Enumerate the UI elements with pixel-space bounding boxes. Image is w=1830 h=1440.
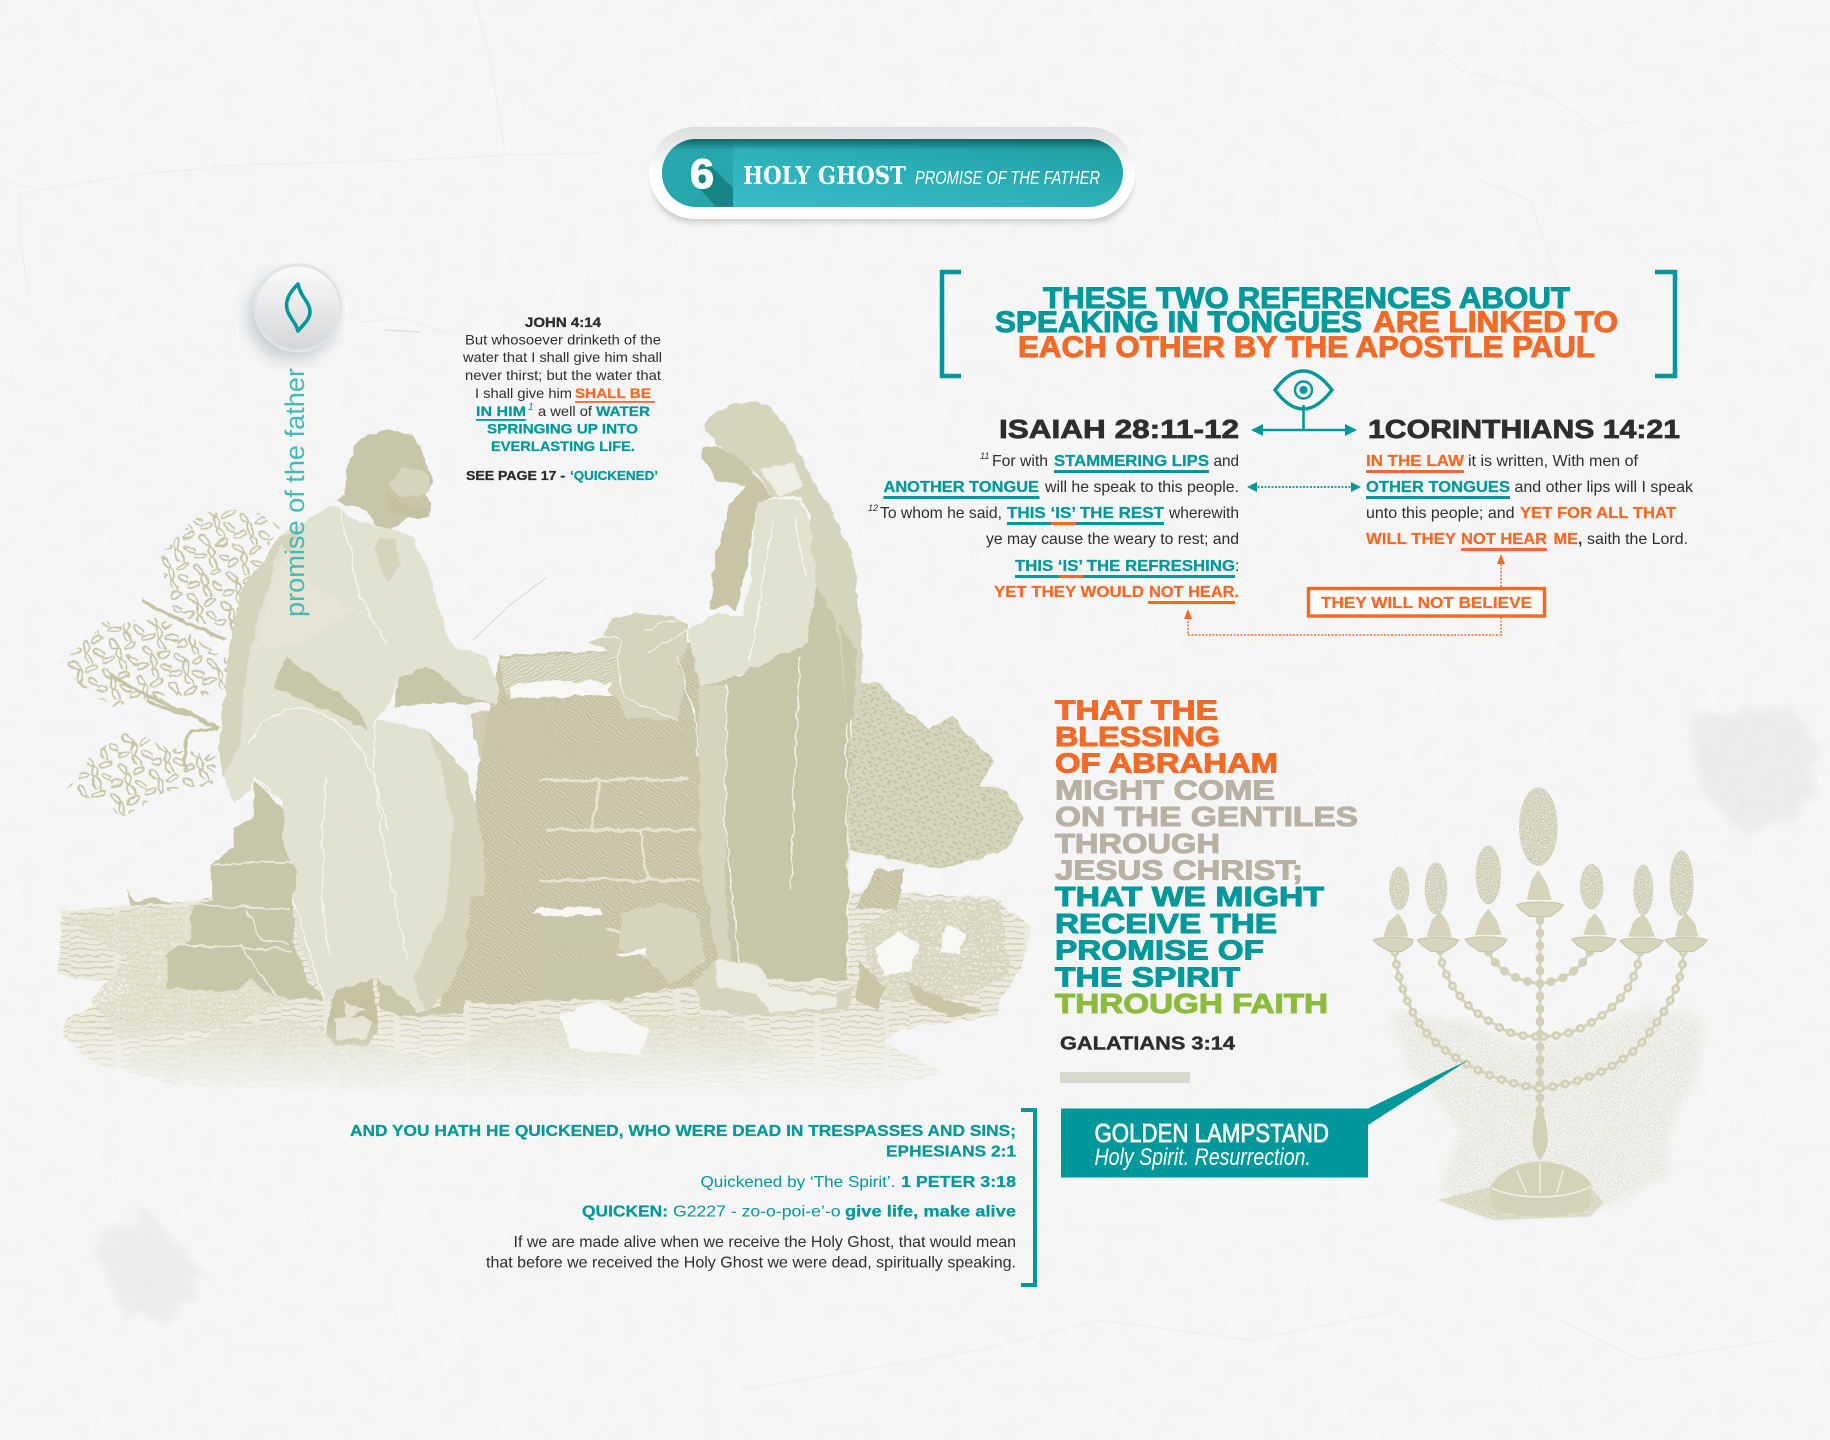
body and sleeve	[688, 498, 817, 687]
reference: 1 Corinthians 14:21: YET FOR ALL THAT	[1520, 505, 1676, 522]
robe shading	[273, 657, 367, 730]
vertical label: promise of the father	[280, 368, 310, 617]
verse: Galatians 3:14: THROUGH FAITH	[1055, 988, 1328, 1019]
heading: two references: ARE LINKED TO	[1373, 306, 1618, 339]
note: quickened: If we are made alive when we receive the Holy Ghost, that would mean	[514, 1234, 1016, 1251]
note: quickened: G2227 - zo-o-poi-e’-o	[673, 1204, 841, 1220]
reference: Isaiah 28:11-12: and	[1214, 453, 1239, 470]
John 4:14 verse: EVERLASTING LIFE.	[491, 438, 635, 454]
smudge	[1390, 1007, 1703, 1220]
note: quickened	[350, 1123, 1016, 1272]
verse: Galatians 3:14: THE SPIRIT	[1055, 961, 1240, 992]
John 4:14 verse: a well of	[538, 403, 592, 419]
heading: two references	[995, 282, 1618, 364]
section title pill: PROMISE OF THE FATHER	[915, 168, 1100, 188]
callout: golden lampstand: Holy Spirit. Resurrection.	[1094, 1144, 1311, 1171]
note: quickened: AND YOU HATH HE QUICKENED, WHO WERE DEAD IN TRESPASSES AND SINS;	[350, 1123, 1016, 1140]
Jesus	[220, 430, 498, 1013]
bottom stones	[530, 903, 707, 1000]
verse: Galatians 3:14: GALATIANS 3:14	[1060, 1032, 1236, 1054]
note: quickened: that before we received the Holy Ghost we were dead, spiritually speaking.	[486, 1254, 1016, 1272]
hair	[710, 477, 773, 610]
note: quickened: Quickened by ‘The Spirit’.	[700, 1174, 896, 1191]
reference: Isaiah 28:11-12: 11	[980, 451, 989, 461]
reference: Isaiah 28:11-12: will he speak to this people.	[1044, 479, 1239, 496]
verse: Galatians 3:14: THROUGH	[1055, 828, 1220, 859]
reference: 1 Corinthians 14:21: IN THE LAW	[1366, 453, 1465, 470]
heading: two references: EACH OTHER BY THE APOSTLE PAUL	[1018, 331, 1595, 364]
heading bracket: right	[1655, 272, 1675, 376]
verse: Galatians 3:14: JESUS CHRIST;	[1055, 854, 1303, 886]
reference: Isaiah 28:11-12: :	[1235, 558, 1239, 575]
cups	[1373, 902, 1707, 953]
jar and hands	[588, 613, 688, 720]
base	[1437, 1113, 1603, 1220]
verse: Galatians 3:14	[1055, 694, 1358, 1054]
robe	[220, 505, 498, 1013]
arms	[1395, 917, 1683, 1133]
reference: Isaiah 28:11-12	[868, 414, 1239, 604]
note: quickened: 1 PETER 3:18	[901, 1174, 1016, 1191]
verse: Galatians 3:14: PROMISE OF	[1055, 935, 1264, 966]
John 4:14 verse: IN HIM	[476, 403, 526, 419]
reference: Isaiah 28:11-12: ANOTHER TONGUE	[884, 479, 1039, 496]
verse: Galatians 3:14: THAT WE MIGHT	[1055, 881, 1324, 912]
heading: two references: SPEAKING IN TONGUES	[995, 306, 1362, 339]
head	[335, 430, 433, 530]
reference: Isaiah 28:11-12: NOT HEAR.	[1149, 584, 1239, 601]
callout: they will not believe: THEY WILL NOT BELIEVE	[1321, 595, 1532, 612]
left bush	[59, 509, 279, 818]
face	[702, 445, 757, 487]
John 4:14 verse: never thirst; but the water that	[465, 367, 661, 383]
John 4:14 verse: ‘QUICKENED’	[570, 468, 658, 483]
callout: golden lampstand	[1061, 1060, 1468, 1178]
reference: 1 Corinthians 14:21: WILL THEY	[1366, 531, 1456, 548]
John 4:14 verse	[462, 314, 662, 483]
note: quickened: QUICKEN:	[582, 1204, 668, 1220]
reference: Isaiah 28:11-12: THIS ‘IS’ THE REFRESHING	[1015, 558, 1235, 575]
section title pill: 6	[690, 150, 714, 197]
John 4:14 verse: SHALL BE	[575, 385, 651, 401]
John 4:14 verse: 1	[528, 402, 534, 413]
note: quickened: give life, make alive	[845, 1204, 1016, 1220]
verse: Galatians 3:14: THAT THE	[1055, 694, 1218, 725]
section title pill: HOLY GHOST	[743, 161, 906, 190]
scarf	[703, 402, 863, 723]
woman	[588, 402, 863, 980]
reference: Isaiah 28:11-12: ISAIAH 28:11-12	[999, 414, 1239, 444]
reference: Isaiah 28:11-12: THIS ‘IS’ THE REST	[1007, 505, 1164, 522]
reference: 1 Corinthians 14:21: it is written, With men of	[1468, 453, 1639, 470]
illustration: Jesus and the woman at the well	[58, 402, 1030, 1095]
verse: Galatians 3:14: OF ABRAHAM	[1055, 748, 1278, 779]
verse: Galatians 3:14: RECEIVE THE	[1055, 908, 1277, 939]
reference: 1 Corinthians 14:21: ME	[1554, 531, 1578, 548]
reference: 1 Corinthians 14:21: NOT HEAR	[1461, 531, 1547, 548]
dotted connector arrows	[1184, 554, 1505, 635]
reference: Isaiah 28:11-12: ye may cause the weary to rest; and	[986, 531, 1239, 548]
reference: Isaiah 28:11-12: 12	[868, 503, 878, 513]
reference: Isaiah 28:11-12: To whom he said,	[880, 505, 1002, 522]
reference: 1 Corinthians 14:21: OTHER TONGUES	[1366, 479, 1510, 496]
ground and rocks	[58, 880, 1030, 1095]
note: quickened: EPHESIANS 2:1	[886, 1144, 1016, 1160]
verse: Galatians 3:14: BLESSING	[1055, 721, 1220, 752]
flames	[1383, 870, 1698, 937]
reference: Isaiah 28:11-12: For with	[992, 453, 1048, 470]
reference: 1 Corinthians 14:21: unto this people; and	[1366, 505, 1514, 522]
icon: eye with double arrow	[1251, 371, 1357, 436]
steps	[167, 780, 323, 1000]
reference: 1 Corinthians 14:21: saith the Lord.	[1587, 531, 1688, 548]
reference: 1 Corinthians 14:21: 1CORINTHIANS 14:21	[1368, 414, 1680, 444]
John 4:14 verse: But whosoever drinketh of the	[465, 332, 661, 348]
verse: Galatians 3:14: MIGHT COME	[1055, 774, 1275, 805]
number shadow	[690, 158, 733, 207]
heading: two references: THESE TWO REFERENCES ABOUT	[1043, 282, 1570, 315]
reference: Isaiah 28:11-12: YET THEY WOULD	[994, 584, 1144, 601]
callout: golden lampstand: GOLDEN LAMPSTAND	[1094, 1118, 1329, 1148]
right bush	[848, 683, 1023, 910]
reference: 1 Corinthians 14:21: ,	[1578, 531, 1582, 548]
John 4:14 verse: JOHN 4:14	[525, 314, 601, 330]
dotted arrow between tongues	[1247, 482, 1361, 492]
skirt	[697, 583, 850, 980]
callout: they will not believe	[1308, 588, 1544, 616]
sandals	[325, 980, 465, 1045]
John 4:14 verse: water that I shall give him shall	[462, 349, 662, 365]
section title pill	[649, 127, 1135, 222]
bracket: quickened note	[1021, 1110, 1035, 1285]
verse: Galatians 3:14: ON THE GENTILES	[1055, 801, 1358, 832]
John 4:14 verse: SEE PAGE 17 -	[466, 468, 565, 483]
reference: 1 Corinthians 14:21	[1366, 414, 1694, 551]
smoke	[1389, 787, 1694, 916]
heading bracket: left	[942, 272, 961, 376]
well	[440, 642, 738, 1006]
John 4:14 verse: I shall give him	[475, 385, 572, 401]
John 4:14 verse: WATER	[596, 403, 650, 419]
badge icon: flame leaf	[248, 265, 341, 360]
menorah illustration	[1373, 787, 1707, 1220]
divider bar	[1060, 1072, 1190, 1083]
woman hem	[693, 960, 855, 1015]
reference: Isaiah 28:11-12: STAMMERING LIPS	[1054, 453, 1209, 470]
reference: Isaiah 28:11-12: wherewith	[1168, 505, 1239, 522]
reference: 1 Corinthians 14:21: and other lips will I speak	[1514, 479, 1694, 496]
John 4:14 verse: SPRINGING UP INTO	[487, 420, 638, 436]
